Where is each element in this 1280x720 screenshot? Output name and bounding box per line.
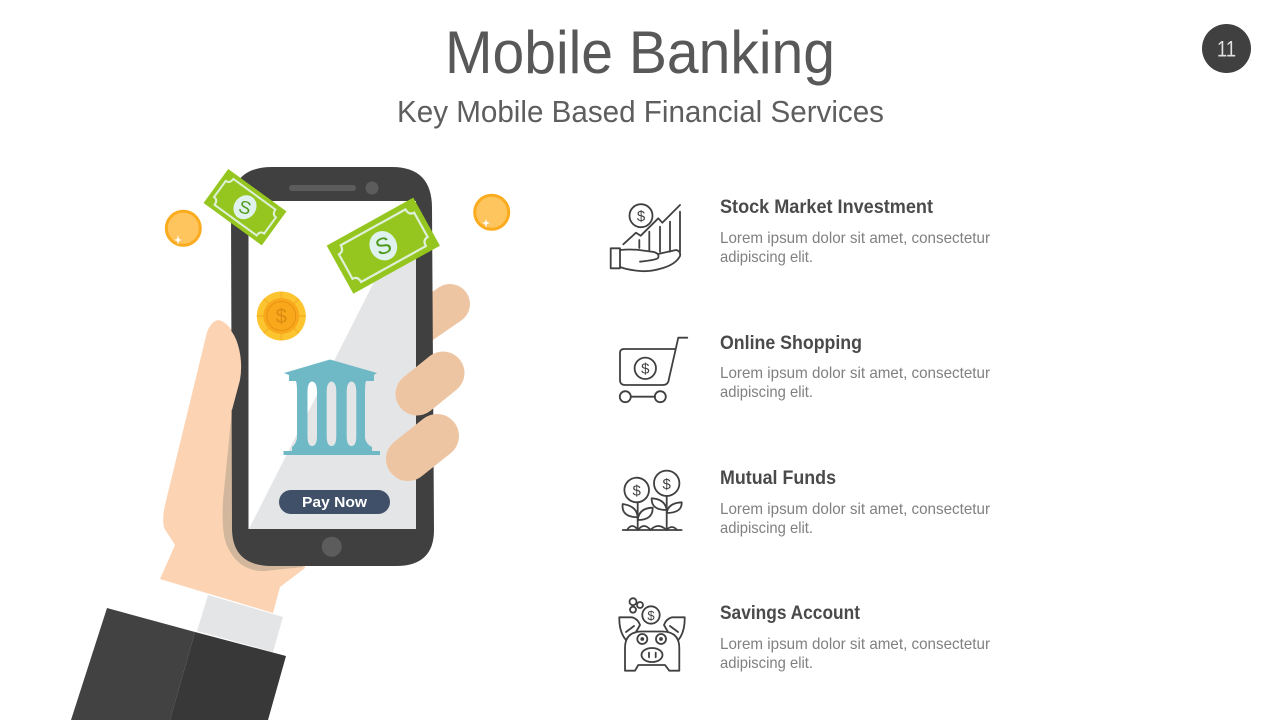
text: online shopping: Lorem ipsum dolor sit amet, consectetur — [720, 365, 991, 382]
text: stock market investment: Stock Market Investment — [720, 197, 934, 218]
finger behind phone — [415, 304, 450, 328]
text: mutual funds: adipiscing elit. — [720, 520, 813, 537]
icon: money plants: $ — [633, 482, 642, 500]
text: stock market investment: Lorem ipsum dolor sit amet, consectetur — [720, 230, 991, 247]
home button — [322, 537, 342, 557]
suit sleeve — [71, 608, 286, 720]
icon: stock market hand: $ — [637, 208, 646, 225]
dollar coin: $ — [276, 306, 287, 328]
speaker — [289, 185, 356, 191]
text: online shopping: adipiscing elit. — [720, 384, 813, 401]
text: online shopping — [720, 333, 991, 401]
bank building icon — [284, 360, 380, 455]
text: savings account — [720, 603, 991, 672]
text: mutual funds: Mutual Funds — [720, 468, 836, 489]
pay now button: Pay Now — [302, 494, 367, 511]
icon: shopping cart: $ — [641, 360, 650, 378]
phone body — [231, 167, 434, 566]
banknote small — [204, 169, 286, 245]
icon: stock market hand — [611, 204, 680, 271]
icon: shopping cart — [620, 338, 687, 402]
page number badge — [1202, 24, 1251, 73]
sleeve cuff — [197, 595, 283, 652]
banknote large: S — [372, 231, 395, 260]
text: stock market investment: adipiscing elit. — [720, 249, 813, 266]
icon: piggy bank: $ — [647, 608, 655, 623]
text: savings account: Savings Account — [720, 603, 861, 624]
illustration: hand holding phone — [71, 167, 450, 720]
pay now button — [279, 490, 390, 514]
finger 3 — [408, 436, 437, 459]
phone screen — [248, 201, 416, 529]
phone shadow — [223, 410, 303, 571]
thumb over phone edge — [215, 322, 241, 410]
icon: piggy bank — [619, 598, 685, 671]
screen light wedge — [249, 258, 416, 529]
dollar coin — [257, 292, 306, 340]
icon: money plants: $ — [663, 476, 672, 493]
text: online shopping: Online Shopping — [720, 333, 862, 354]
icon: money plants — [623, 471, 682, 530]
banknote large — [327, 198, 440, 294]
gold coin right — [475, 195, 509, 229]
text: stock market investment — [720, 197, 991, 266]
text: mutual funds — [720, 468, 991, 537]
title: Mobile Banking — [445, 19, 835, 86]
gold coin left — [166, 211, 200, 245]
text: savings account: adipiscing elit. — [720, 655, 813, 672]
hand and thumb — [160, 320, 305, 613]
text: mutual funds: Lorem ipsum dolor sit amet, consectetur — [720, 501, 991, 518]
text: savings account: Lorem ipsum dolor sit amet, consectetur — [720, 636, 991, 653]
subtitle: Key Mobile Based Financial Services — [397, 94, 884, 129]
finger 2 — [417, 373, 443, 394]
camera — [366, 182, 378, 194]
page number badge: 11 — [1217, 36, 1236, 62]
banknote small: S — [236, 196, 253, 219]
